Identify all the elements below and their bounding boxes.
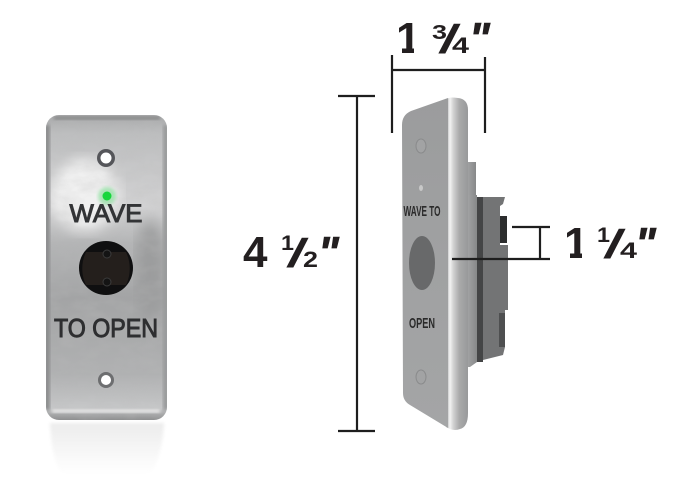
WAVE label: WAVE <box>70 200 142 228</box>
width dimension: 1 3/4 inch: 1 <box>396 14 420 63</box>
bottom mounting hole <box>98 372 114 388</box>
plate reflection <box>50 423 164 475</box>
height dimension: 4 1/2 inch: / <box>287 232 310 276</box>
side view switch <box>402 98 508 430</box>
height dimension: 4 1/2 inch: 1 <box>281 232 294 255</box>
plate edge <box>446 98 468 430</box>
green LED <box>98 187 116 205</box>
height dimension: 4 1/2 inch: 4 <box>243 228 268 277</box>
front view switch plate <box>44 115 169 475</box>
height dimension: 4 1/2 inch: 2 <box>303 247 318 272</box>
plate face <box>402 98 448 428</box>
side LED <box>419 185 423 191</box>
depth dimension: 1 1/4 inch: 4 <box>620 238 638 263</box>
infographic: wave-to-open switch dimensions <box>46 22 657 452</box>
brushed metal plate <box>46 115 167 420</box>
width dimension: 1 3/4 inch: " <box>469 14 491 63</box>
width dimension: 1 3/4 inch: 4 <box>452 33 470 58</box>
depth dimension: 1 1/4 inch: 1 <box>597 224 610 247</box>
side top screw <box>416 139 426 153</box>
side OPEN label: OPEN <box>409 315 435 332</box>
side WAVE TO label: WAVE TO <box>404 203 441 220</box>
rear housing <box>466 162 508 367</box>
depth dimension: 1 1/4 inch: " <box>635 219 657 268</box>
width dimension: 1 3/4 inch: / <box>439 18 462 62</box>
sensor <box>79 241 133 295</box>
depth dimension: 1 1/4 inch <box>452 226 657 260</box>
side sensor <box>409 236 435 290</box>
depth dimension: 1 1/4 inch: / <box>604 223 627 267</box>
depth dimension: 1 1/4 inch: 1 <box>564 219 588 268</box>
width dimension: 1 3/4 inch: 3 <box>432 22 447 44</box>
width dimension: 1 3/4 inch <box>392 14 491 133</box>
TO OPEN label: TO OPEN <box>54 313 158 343</box>
height dimension: 4 1/2 inch <box>243 96 375 431</box>
height dimension: 4 1/2 inch: " <box>318 228 340 277</box>
side bottom screw <box>416 370 426 384</box>
top mounting hole <box>97 149 115 167</box>
